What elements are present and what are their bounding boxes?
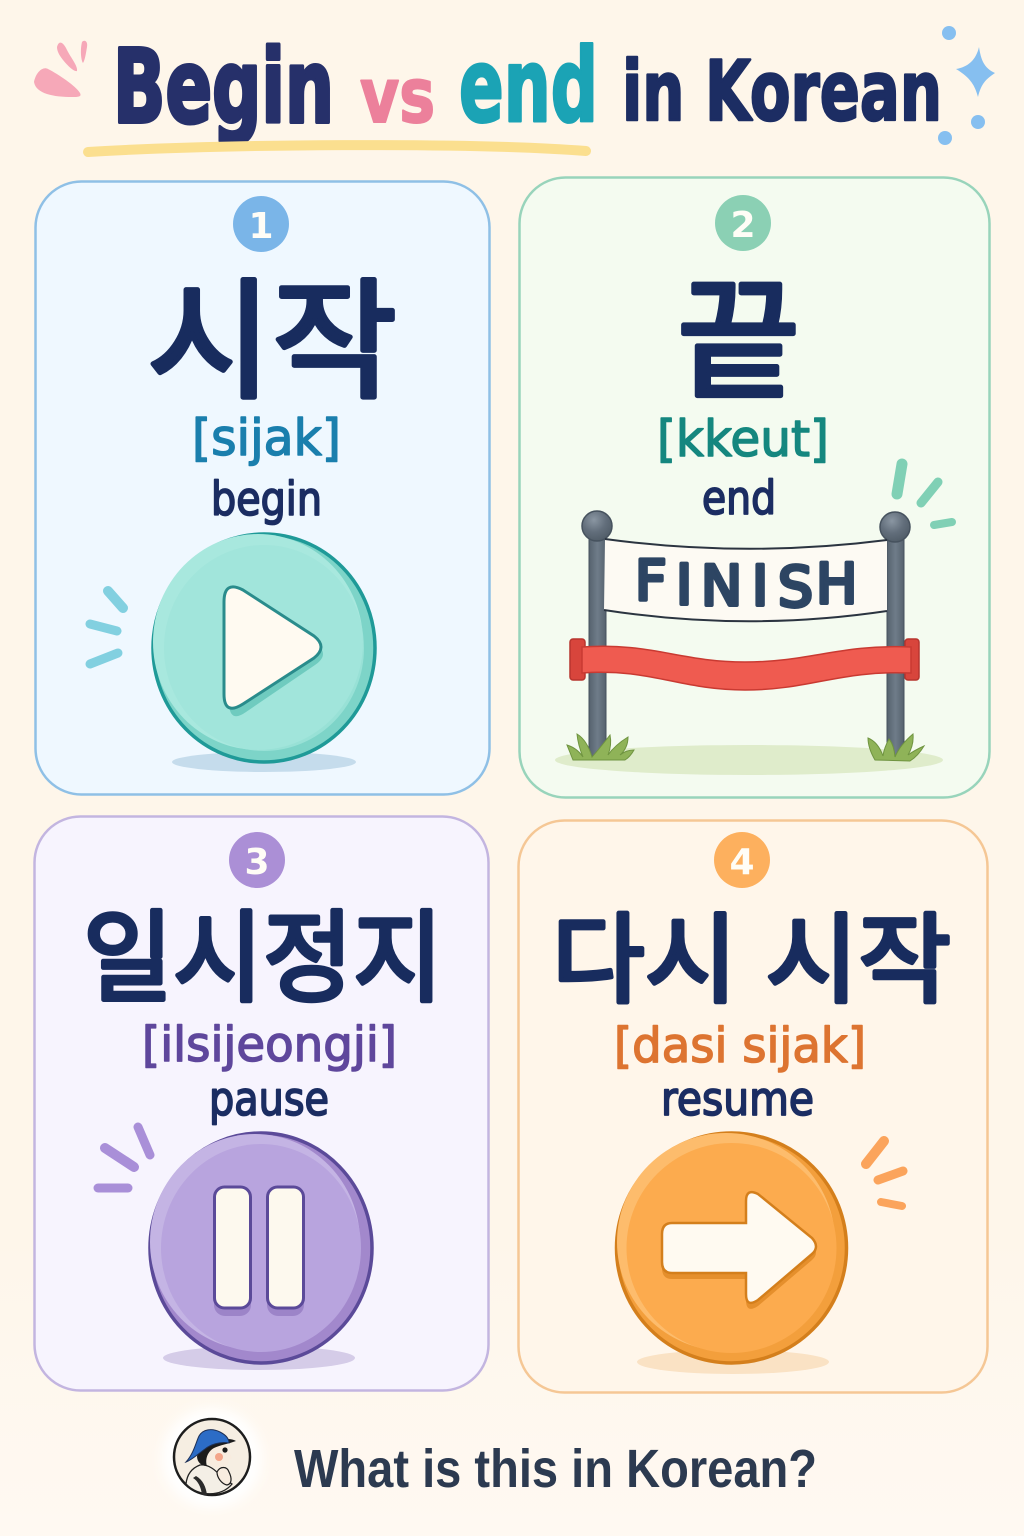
poles [582,511,910,756]
meaning: begin: begin [211,472,322,526]
number badge 3: 3 [244,842,270,883]
romanization: sijak: [sijak] [192,409,341,467]
icon: motion ticks [98,1127,150,1188]
ground [555,745,943,775]
title word: Begin: Begin [113,28,334,147]
romanization: ilsijeongji: [ilsijeongji] [142,1017,397,1073]
decoration: blue sparkle and dots [938,26,995,145]
panel: 4 resume [518,820,988,1392]
finish banner [604,539,887,621]
title underline [88,145,586,152]
illustration: finish line [555,511,943,775]
footer: avatar [162,1408,262,1508]
icon: motion ticks [866,1141,903,1206]
icon: pause button [150,1133,372,1370]
red ribbon [570,639,919,690]
number badge 1 [233,196,289,252]
title [113,27,942,147]
panel: 3 pause [34,816,488,1390]
icon: motion ticks [90,591,123,664]
number badge 3 [229,832,285,888]
number badge 4 [714,832,770,888]
meaning: pause: pause [209,1072,329,1126]
decoration: pink petals [34,41,87,97]
panel: 2 end [520,178,990,798]
romanization: dasi sijak: [dasi sijak] [614,1018,866,1074]
Korean word: dasi sijak: 다시 시작 [552,905,951,1015]
number badge 4: 4 [729,842,755,883]
number badge 1: 1 [248,206,274,247]
romanization: kkeut: [kkeut] [657,410,829,468]
Korean word: kkeut: 끝 [677,269,800,415]
meaning: end: end [702,471,776,525]
Korean word: sijak: 시작 [147,269,397,415]
icon: play button [153,534,375,772]
icon: motion ticks [897,464,952,525]
meaning: resume: resume [661,1072,814,1126]
title word: end: end [459,27,598,146]
number badge 2: 2 [730,205,756,246]
Korean word: ilsijeongji: 일시정지 [83,903,443,1015]
panel: 1 begin [36,182,490,794]
title word: vs: vs [360,51,435,140]
number badge 2 [715,195,771,251]
finish banner: FINISH [635,549,857,619]
footer: question: What is this in Korean? [294,1439,817,1499]
icon: resume arrow button [616,1133,846,1374]
grass tufts [567,734,924,761]
